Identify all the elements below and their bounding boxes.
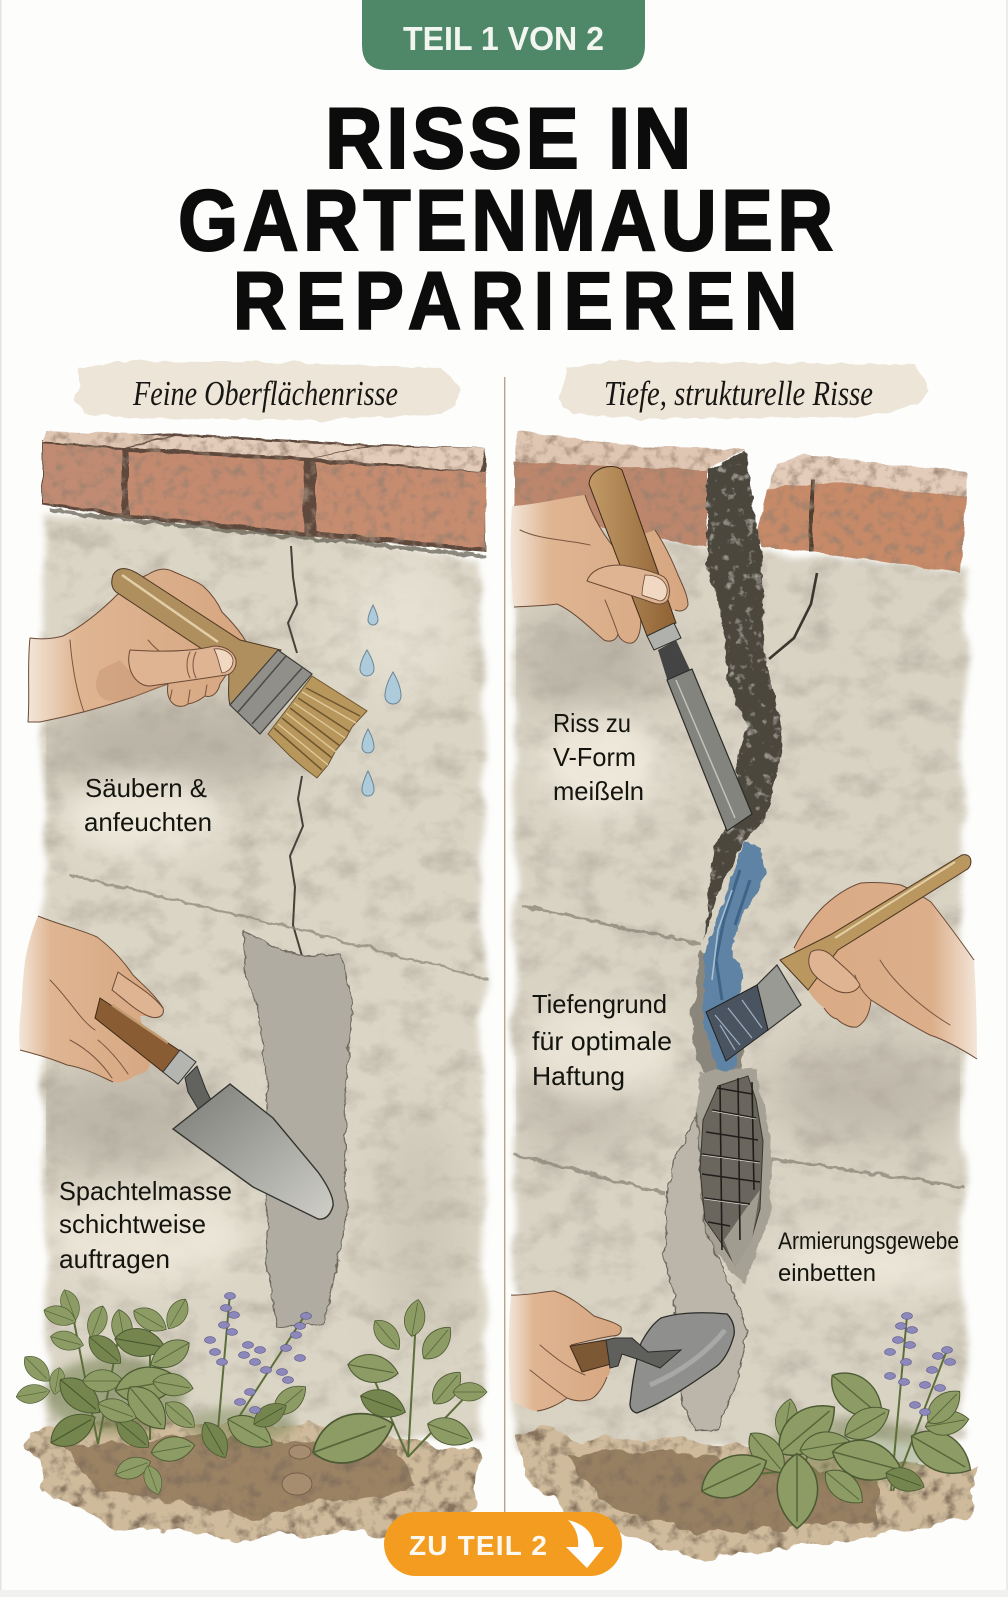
trowel handle — [95, 998, 180, 1072]
plants — [693, 1313, 980, 1528]
primer stroke — [704, 841, 766, 1082]
trowel hand and chisel hand — [509, 466, 752, 1413]
brush ferrule — [757, 965, 801, 1030]
title — [178, 90, 833, 347]
caption: embed reinforcing mesh — [778, 1228, 959, 1287]
water drops — [360, 605, 401, 796]
plaster around mesh — [694, 1068, 772, 1285]
title: RISSE IN — [325, 90, 691, 187]
gray fringe around primer — [689, 950, 745, 1078]
caption: clean and dampen: Säubern & — [85, 773, 207, 803]
bricks — [42, 431, 486, 552]
caption: primer for adhesion — [532, 989, 672, 1091]
brush ferrule — [230, 650, 312, 734]
button: to part 2 — [384, 1512, 622, 1576]
caption: primer for adhesion: für optimale — [532, 1026, 672, 1056]
wall: plaster — [516, 510, 964, 1450]
wall shading — [510, 610, 970, 1295]
filler patch — [243, 931, 353, 1327]
caption: apply filler in layers: schichtweise — [59, 1209, 206, 1239]
wall shading — [25, 550, 460, 1350]
chisel ferrule — [647, 623, 681, 650]
trowel handle — [570, 1340, 611, 1372]
caption: apply filler in layers: Spachtelmasse — [59, 1176, 232, 1206]
caption: primer for adhesion: Tiefengrund — [532, 989, 667, 1019]
caption: embed reinforcing mesh: einbetten — [778, 1260, 876, 1287]
trowel neck — [606, 1338, 681, 1368]
big crack — [704, 451, 782, 940]
crack: fine — [288, 546, 303, 956]
caption: chisel crack to V-shape: V-Form — [553, 742, 636, 772]
trowel blade — [630, 1313, 734, 1413]
thumb — [809, 950, 860, 993]
hand with trowel — [19, 916, 333, 1219]
soil — [516, 1430, 975, 1556]
lavender — [884, 1313, 956, 1415]
badge: part 1 of 2 — [362, 0, 645, 70]
hand with chisel — [511, 466, 752, 831]
reinforcement mesh — [700, 1076, 763, 1268]
mortar joint — [50, 510, 486, 556]
brush handle — [112, 569, 281, 705]
thumb — [587, 565, 669, 604]
caption: chisel crack to V-shape — [553, 708, 644, 806]
caption: apply filler in layers — [59, 1176, 232, 1274]
button: to part 2: ZU TEIL 2 — [409, 1530, 547, 1561]
hand with primer brush — [706, 855, 977, 1061]
caption: clean and dampen — [84, 773, 212, 837]
caption: clean and dampen: anfeuchten — [84, 807, 212, 837]
chisel blade — [667, 669, 752, 831]
heading: fine surface cracks — [74, 361, 460, 420]
hand with brush — [28, 569, 367, 778]
badge: part 1 of 2: TEIL 1 VON 2 — [403, 20, 604, 57]
hand with trowel — [509, 1291, 734, 1413]
caption: chisel crack to V-shape: Riss zu — [553, 708, 631, 738]
thumb — [129, 646, 236, 686]
trowel blade — [173, 1084, 333, 1219]
wall: plaster — [44, 510, 484, 1440]
title: REPARIEREN — [233, 254, 797, 347]
caption: primer for adhesion: Haftung — [532, 1061, 625, 1091]
brush bristles — [706, 985, 768, 1061]
chisel shank — [658, 640, 690, 682]
divider — [504, 377, 505, 1512]
caption: chisel crack to V-shape: meißeln — [553, 776, 644, 806]
panel: fine surface cracks — [15, 361, 487, 1538]
lavender — [204, 1293, 312, 1413]
panel: deep structural cracks — [509, 361, 980, 1556]
chisel handle — [589, 466, 676, 636]
bricks — [514, 431, 967, 573]
icon: curved down arrow — [566, 1520, 604, 1568]
heading: deep structural cracks: Tiefe, strukturelle Risse — [604, 374, 873, 413]
heading: deep structural cracks — [558, 361, 928, 419]
caption: apply filler in layers: auftragen — [59, 1244, 170, 1274]
trowel ferrule — [163, 1050, 196, 1084]
mortar line — [70, 875, 487, 979]
soil — [30, 1418, 480, 1538]
heading: fine surface cracks: Feine Oberflächenrisse — [132, 374, 398, 413]
mortar lines — [514, 906, 964, 1194]
plaster repair — [664, 1114, 747, 1430]
plants — [15, 1287, 487, 1497]
title: GARTENMAUER — [178, 173, 833, 269]
caption: embed reinforcing mesh: Armierungsgewebe — [778, 1228, 959, 1255]
brush bristles — [268, 676, 367, 778]
trowel neck — [185, 1066, 222, 1122]
crack: branch — [769, 573, 817, 659]
brush handle — [780, 855, 971, 990]
thumb tip — [112, 972, 163, 1018]
